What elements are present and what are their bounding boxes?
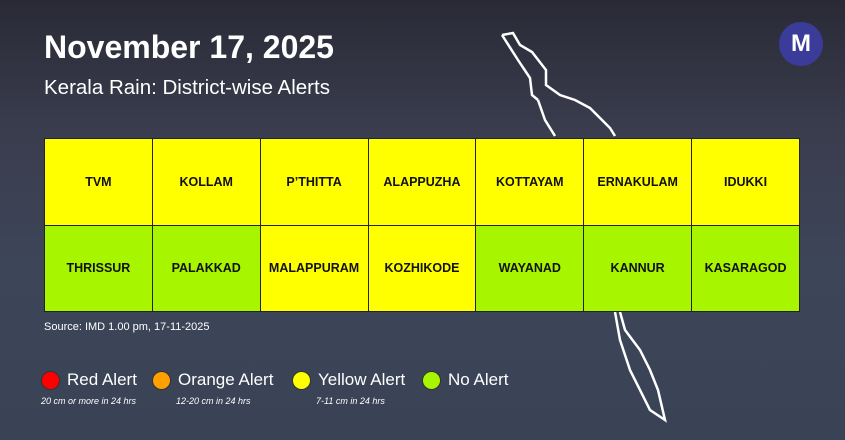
- legend: red: [41, 370, 137, 406]
- subtitle: Kerala Rain: District-wise Alerts: [44, 76, 330, 99]
- table: district alerts: IDUKKI: [724, 175, 767, 189]
- legend: yellow: Yellow Alert: [318, 370, 405, 389]
- legend: yellow: 7-11 cm in 24 hrs: [316, 396, 385, 406]
- legend: red: 20 cm or more in 24 hrs: [41, 396, 136, 406]
- legend: orange: 12-20 cm in 24 hrs: [176, 396, 251, 406]
- table: district alerts: [44, 138, 800, 312]
- table: district alerts: THRISSUR: [66, 261, 130, 275]
- table: district alerts: P’THITTA: [286, 175, 342, 189]
- table: district alerts: KOTTAYAM: [496, 175, 564, 189]
- table: district alerts: KOLLAM: [179, 175, 233, 189]
- legend: orange: Orange Alert: [178, 370, 273, 389]
- legend: yellow: [292, 370, 406, 406]
- table: district alerts: KANNUR: [611, 261, 665, 275]
- icon: logo: M: [791, 30, 811, 57]
- table: district alerts: TVM: [85, 175, 112, 189]
- icon: logo: [779, 22, 823, 66]
- legend: green: No Alert: [448, 370, 508, 389]
- legend: orange: [152, 370, 274, 406]
- source: Source: IMD 1.00 pm, 17-11-2025: [44, 321, 210, 333]
- title: November 17, 2025: [44, 29, 334, 65]
- table: district alerts: PALAKKAD: [172, 261, 241, 275]
- table: district alerts: KASARAGOD: [705, 261, 787, 275]
- table: district alerts: MALAPPURAM: [269, 261, 359, 275]
- table: district alerts: ERNAKULAM: [597, 175, 678, 189]
- table: district alerts: WAYANAD: [499, 261, 561, 275]
- legend: red: Red Alert: [67, 370, 137, 389]
- legend: green: [422, 370, 508, 390]
- table: district alerts: ALAPPUZHA: [383, 175, 460, 189]
- table: district alerts: KOZHIKODE: [384, 261, 459, 275]
